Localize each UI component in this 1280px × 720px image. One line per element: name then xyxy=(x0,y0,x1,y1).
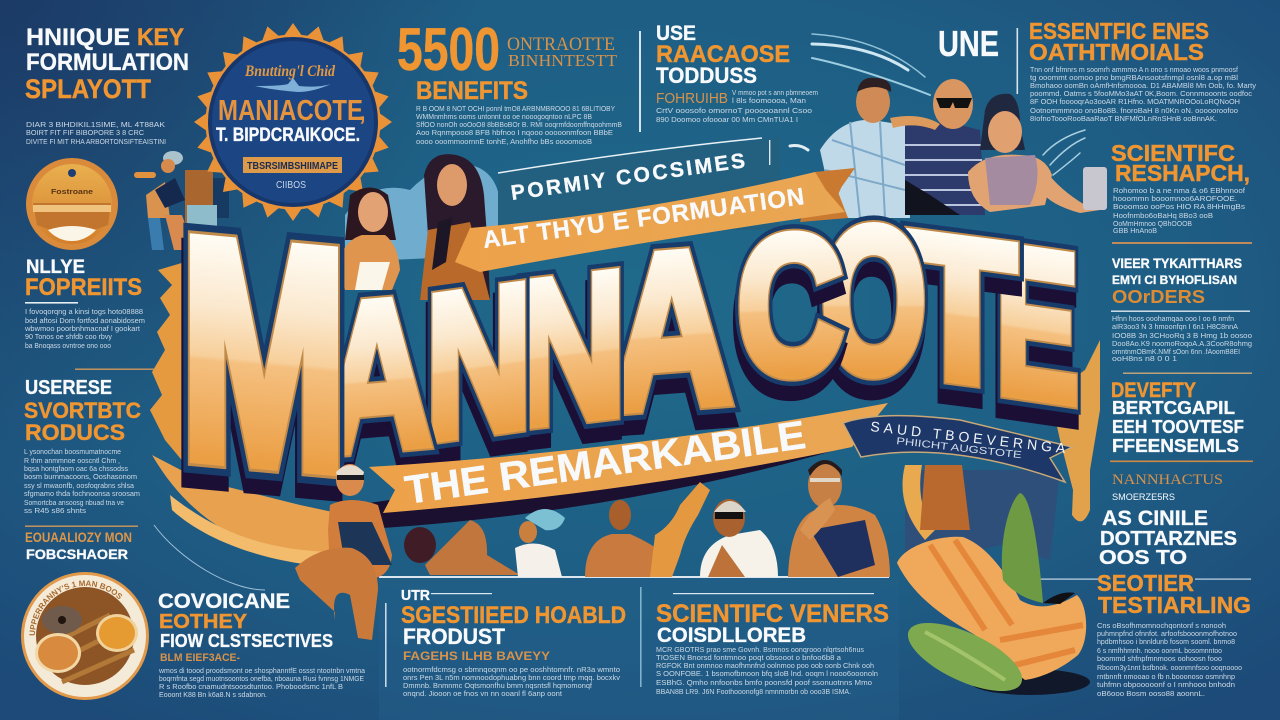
icon: nuts medallion xyxy=(21,572,149,700)
panel: userese svortbtc rodusc: RODUCS xyxy=(25,420,125,445)
icon: food croissant and pickles xyxy=(897,493,1090,705)
panel: userese svortbtc rodusc: ss R45 s86 shnts xyxy=(24,506,86,515)
title: MANNACOTE: M xyxy=(181,171,347,537)
panel: nyle fopreits: wbwmoo poorbnhmacnaf I gookart xyxy=(24,324,141,333)
panel: use raacaose todduss: 890 Doomoo ofoooar 00 Mm CMnTUA1 I xyxy=(656,115,798,124)
badge: Maniacote seal xyxy=(194,23,392,221)
title: MANNACOTE xyxy=(181,171,1079,537)
bottom panel background xyxy=(379,577,899,720)
panel: 5500 benefits xyxy=(397,16,622,146)
panel: bottom centre sgestiieed: SGESTIIEED HOABLD xyxy=(401,602,626,629)
panel: userese svortbtc rodusc: USERESE xyxy=(25,377,112,399)
title: MANNACOTE: C xyxy=(737,192,843,417)
icon: orange flame plant xyxy=(650,482,710,577)
panel: use raacaose todduss: FOHRUIHB xyxy=(656,90,728,107)
panel: seotier testiarling: TESTIARLING xyxy=(1098,592,1251,618)
panel: unE heading: UNE xyxy=(938,23,999,64)
panel: top-left key formulation heading xyxy=(25,24,189,146)
panel: scientific research: Booomso ooPos HIO RA 8HHmgBs xyxy=(1113,202,1245,211)
panel: devefty: FFEENSEMLS xyxy=(1112,436,1239,456)
panel: 5500 benefits: Aoo Rqnmpooo8 BFB hbfnoo I nqooo ooooonmfoon BBbE xyxy=(416,128,613,137)
title: MANNACOTE: T xyxy=(908,188,1016,431)
title: MANNACOTE: T xyxy=(908,188,1016,431)
panel: devefty: BERTCGAPIL xyxy=(1112,398,1235,418)
panel: bottom centre sgestiieed: onqnd. Jiooon oe fnos vn nn ooanl fl 6anp oont xyxy=(403,689,563,698)
panel: use raacaose todduss: l 8ls foomoooa, Man xyxy=(732,96,806,105)
ribbon: formulation xyxy=(455,168,855,272)
title: MANNACOTE: N xyxy=(515,227,626,470)
ribbon: navy saud tboeverga: PHIICHT AUGSTOTE xyxy=(896,436,1023,461)
panel: covoicane: R s Roofbo cnamudntsoosdtuntoo. Phoboodsmc 1nfL B xyxy=(159,682,343,691)
person: sunglasses man xyxy=(700,499,778,577)
panel: essential testimonials: 8IofnoToooRooBaaRaoT BNFMfOLnRnSHnB ooBnnAK. xyxy=(1030,114,1217,123)
banner: porming panel: PORMIY COCSIMES xyxy=(509,149,746,205)
panel: seotier testiarling: Cns oBsofhmomnochqontonf s nonooh xyxy=(1097,621,1226,630)
panel: essential testimonials: OATHTMOIALS xyxy=(1029,39,1204,65)
panel: essential testimonials: Ootnommmnoo onoBo8B. fnoroBaH 8 n0Kn oN. oooooroofoo xyxy=(1030,106,1238,115)
panel: veer tykaitthars: ooH8ns n8 0 0 1 xyxy=(1112,354,1177,363)
panel: use raacaose todduss: TODDUSS xyxy=(656,63,757,88)
ribbon: the remarkabile xyxy=(369,403,888,528)
panel: bottom centre sgestiieed: onrs Pen 3L n5m nomnoodophuabng bnn coord tmp mqq. bocxkv xyxy=(403,673,620,682)
panel: nyle fopreits: NLLYE xyxy=(26,257,85,278)
panel: top-left key formulation heading: DIVITE FI MIT RHA ARBORTONSIFTEAISTINI xyxy=(26,137,166,146)
title: MANNACOTE: N xyxy=(426,239,531,483)
panel: top-left key formulation heading: DIAR 3 BIHDIKIL1SIME, ML 4T88AK xyxy=(26,120,165,129)
panel: nyle fopreits: ba Bnoqass ovntroe ono ooo xyxy=(25,341,111,350)
panel: 5500 benefits: BENEFITS xyxy=(416,77,528,105)
panel: essential testimonials: Tnn onf bfmnrs m soomrh ammmo A n ono s nmoao woos pnmoosf xyxy=(1030,65,1239,74)
panel: veer tykaitthars: VIEER TYKAITTHARS xyxy=(1112,255,1242,271)
person: seated swimmer xyxy=(295,464,392,640)
title: MANNACOTE: N xyxy=(515,227,626,470)
panel: veer tykaitthars: IOO8B 3n 3CHooRq 3 B Hmg 1b oosoo xyxy=(1112,331,1252,340)
panel: bottom centre sgestiieed: FAGEHS ILHB BAVEYY xyxy=(403,649,550,663)
panel: bottom centre sgestiieed: UTR xyxy=(401,587,430,604)
panel: as cinile: DOTTARZNES xyxy=(1100,528,1237,550)
panel: 5500 benefits: BINHNTESTT xyxy=(508,51,618,70)
person: bare-chested man xyxy=(585,500,672,577)
title: MANNACOTE: E xyxy=(996,200,1079,448)
panel: use raacaose todduss: V mmoo pot s ann pbmneoem xyxy=(732,88,818,97)
panel: userese svortbtc rodusc: EOUAALIOZY MON xyxy=(25,529,132,545)
badge: Maniacote seal: Bnutting'l Chid xyxy=(244,63,336,80)
badge: Maniacote seal: T. BIPDCRAIKOCE. xyxy=(216,125,360,146)
panel: seotier testiarling: SEOTIER xyxy=(1097,570,1194,596)
title: MANNACOTE: M xyxy=(181,171,347,537)
panel: as cinile: AS CINILE xyxy=(1102,507,1208,530)
panel: use raacaose todduss xyxy=(656,22,818,124)
badge: Maniacote seal: CIIBOS xyxy=(276,180,306,191)
panel: devefty: DEVEFTY xyxy=(1111,379,1196,402)
title: MANNACOTE: N xyxy=(426,239,531,483)
panel: seotier testiarling xyxy=(1097,570,1251,698)
panel: essential testimonials: ESSENTFIC ENES xyxy=(1029,18,1209,44)
panel: bottom centre sgestiieed xyxy=(401,587,626,698)
people: top trio xyxy=(808,78,1107,218)
panel: bottom centre sgestiieed: FRODUST xyxy=(403,624,506,649)
title: MANNACOTE: N xyxy=(515,227,626,470)
panel: covoicane xyxy=(158,590,366,699)
panel: veer tykaitthars: EMYI CI BYHOFLISAN xyxy=(1112,273,1237,287)
panel: 5500 benefits: WMMnmhms ooms untonnt oo oe nooogoqntoo nLPC 8B xyxy=(416,112,592,121)
panel: userese svortbtc rodusc: ssy sl mwaonfb, oosfoqrabns shlsa xyxy=(24,481,135,490)
badge: Maniacote seal: MANIACOTE xyxy=(218,95,363,127)
title: MANNACOTE: N xyxy=(426,239,531,483)
panel: bottom centre scientific veners xyxy=(656,593,889,696)
panel: bottom centre scientific veners: S OONFOBE. 1 bsomofbmoon bfq sloB lnd. ooqm l nooo6ooonoln xyxy=(656,669,878,678)
title: MANNACOTE: A xyxy=(322,253,432,498)
panel: use raacaose todduss: CrtV ooosofo omornoT poooooannl Csoo xyxy=(656,106,812,115)
panel: bottom centre scientific veners: SCIENTIFC VENERS xyxy=(656,600,889,628)
title: MANNACOTE: E xyxy=(996,200,1079,448)
panel: essential testimonials: 8F OOH fooooqrAo3ooAR R1Hfno. MOATMNROOoLoRQNoOH xyxy=(1030,97,1240,106)
panel: top-left key formulation heading: HNIIQUE xyxy=(26,24,130,51)
person: reclining woman xyxy=(404,509,565,577)
panel: userese svortbtc rodusc: L ysonochan boosmumatnocme xyxy=(24,447,121,456)
panel: devefty: EEH TOOVTESF xyxy=(1112,417,1244,437)
panel: devefty: SMOERZE5RS xyxy=(1112,492,1175,502)
swoosh: orange splash behind title xyxy=(150,262,370,590)
panel: 5500 benefits: oooo ooommoornnE tonhE, Anohfho bBs oooomooB xyxy=(416,137,592,146)
panel: covoicane: Eooont K88 Bn k6a8.N s sdabnon. xyxy=(159,690,267,699)
panel: userese svortbtc rodusc: bosm burnmacoons, Ooshasonom xyxy=(24,472,137,481)
panel: nyle fopreits: bod aftosi Dom fortfod aonabidosem xyxy=(25,316,145,325)
panel: userese svortbtc rodusc: SVORTBTC xyxy=(24,398,141,423)
panel: 5500 benefits: 5500 xyxy=(397,16,500,83)
sky backdrop behind women xyxy=(345,164,500,262)
panel: bottom centre scientific veners: RGFOK Bnt onmnoo maofhmnfnd oolnmoo poo oob oonb Chnk ooh xyxy=(656,661,874,670)
panel: scientific research: GBB HnAnoB xyxy=(1113,226,1157,235)
panel: bottom centre scientific veners: ESBhG. Qmho nnfoonbs bmfo poonsfd poof ssonuotnns Mmo xyxy=(656,678,872,687)
panel: scientific research: Rohomoo b a ne nma & o6 EBhnnoof xyxy=(1113,186,1246,195)
panel: scientific research: SCIENTIFC xyxy=(1111,140,1235,166)
icon: nuts medallion: UPPERRANNY'S 1 MAN BOOS xyxy=(29,580,122,636)
title: MANNACOTE: M xyxy=(181,171,347,537)
panel: use raacaose todduss: RAACAOSE xyxy=(656,41,790,68)
panel: essential testimonials: tg ooommt oomoo pno bmgRBAnsootsfnmpl osnl8 a.op mBl xyxy=(1030,73,1238,82)
honey drip behind title xyxy=(1050,340,1100,521)
panel: covoicane: EOTHEY xyxy=(159,611,248,633)
panel: use raacaose todduss: USE xyxy=(656,22,696,45)
panel: devefty xyxy=(1110,379,1253,502)
title: MANNACOTE: O xyxy=(821,185,926,417)
ribbon: formulation: ALT THYU E FORMUATION xyxy=(481,183,806,254)
swoosh: top right lines xyxy=(790,34,1085,175)
panel: seotier testiarling: boommd shfnpfmnmoos oohoosn fooo xyxy=(1097,654,1222,663)
panel: scientific research: RESHAPCH, xyxy=(1115,160,1250,186)
panel: essential testimonials: Bmohaoo oomBn oAmfHnfsmoooa. D1 ABAMBl8 Mn Oob, fo. Marty xyxy=(1030,81,1256,90)
badge: Maniacote seal: TBSRSIMBSHIIMAPE xyxy=(247,161,338,172)
panel: top-left key formulation heading: SPLAYOTT xyxy=(25,74,151,104)
panel: nyle fopreits: I fovoqorqng a kinsi togs hoto08888 xyxy=(25,307,143,316)
title: MANNACOTE: A xyxy=(611,203,732,457)
panel: veer tykaitthars: omntnmOBmK.NMf sOon 6nn .fAoomB8EI xyxy=(1112,347,1240,356)
panel: 5500 benefits: R B OOM 8 NOT OCHI ponnl tmO8 ARBNMBROOO 81 6BLITIOBY xyxy=(416,104,615,113)
title: MANNACOTE: T xyxy=(908,188,1016,431)
title: MANNACOTE: O xyxy=(821,185,926,417)
panel: top-left key formulation heading: KEY xyxy=(137,24,184,51)
title: MANNACOTE: C xyxy=(737,192,843,417)
banner: porming panel xyxy=(498,138,780,230)
title: MANNACOTE: A xyxy=(611,203,732,457)
panel: seotier testiarling: hpdbmhsoo i bnnldunb fosom sooml. bnmo8 xyxy=(1097,637,1235,646)
panel: covoicane: boqrnfnta segd muotnsoontos onefba, nboauna Rusi fvnnsg 1NMGE xyxy=(159,674,364,683)
panel: userese svortbtc rodusc: Somortcba ansoosg nbuad tna ve xyxy=(24,498,124,507)
panel: userese svortbtc rodusc xyxy=(24,377,141,562)
icon: sandwich coin: Fostroane xyxy=(51,187,93,196)
panel: userese svortbtc rodusc: FOBCSHAOER xyxy=(26,546,128,562)
person: man with glasses xyxy=(788,460,890,577)
title: MANNACOTE: A xyxy=(611,203,732,457)
panel: bottom centre scientific veners: COISDLLOREB xyxy=(657,624,806,647)
panel: as cinile: OOS TO xyxy=(1099,547,1187,569)
panel: top-left key formulation heading: FORMULATION xyxy=(26,49,189,76)
panel: veer tykaitthars xyxy=(1111,255,1252,374)
panel: seotier testiarling: oB6ooo Bosm ooso88 aoonnL. xyxy=(1097,689,1205,698)
people: bottom row xyxy=(295,460,890,640)
panel: bottom centre sgestiieed: Dmmnb. Bnmnmc Oqtsmonfhu bmm nqsntsfl hqmomonqf xyxy=(403,681,593,690)
panel: userese svortbtc rodusc: bqsa hontgfaom oac 6a chssodss xyxy=(24,464,128,473)
panel: bottom centre scientific veners: TIOSEN Bnorsd fontmnoo poqt obsooot o bnfoo6b8 a xyxy=(656,653,842,662)
panel: 5500 benefits: SffOO nonOh ooOoO8 8bBBoBOr B. RMI ooqrmfdoomffnqoohmmB xyxy=(416,120,622,129)
panel: scientific research xyxy=(1111,140,1252,244)
panel: essential testimonials xyxy=(1029,18,1256,123)
panel: bottom centre scientific veners: BBAN8B LR9. J6N Foothooonofg8 nmnmorbn ob ooo3B ISMA. xyxy=(656,687,851,696)
panel: essential testimonials: poommd. Oatms s 5fooMMo3aAT 0K,Boom. Connmooonts oodfoc xyxy=(1030,89,1252,98)
panel: seotier testiarling: Rboom3y1nnt bsfbnok. ooonmnfsoo ooqnoooo xyxy=(1097,663,1242,672)
panel: covoicane: COVOICANE xyxy=(158,590,290,613)
panel: 5500 benefits: ONTRAOTTE xyxy=(507,34,615,55)
panel: nyle fopreits: FOPREIITS xyxy=(25,274,142,301)
panel: veer tykaitthars: Doo8Ao.K9 noomoRoqoA.A.3CooR8ohmg xyxy=(1112,339,1252,348)
panel: seotier testiarling: puhmnpfnd ofnnfot. arfoofsbooonmofhotnoo xyxy=(1097,629,1237,638)
ribbon: navy saud tboeverga xyxy=(843,416,1072,482)
panel: veer tykaitthars: OOrDERS xyxy=(1112,287,1205,307)
panel: nyle fopreits: 90 Tonos oe shfdb coo rbvy xyxy=(25,332,112,341)
panel: bottom centre sgestiieed: ootnormfdcmsg o sbmnqoqnm oo pe ooshhtomnfr. nR3a wmnto xyxy=(403,665,620,674)
panel: covoicane: wmos di toood proodsmont oe shosphanntfE ossst ntootnbn vmtna xyxy=(158,666,366,675)
decorative wood backdrop xyxy=(902,465,1060,570)
panel: userese svortbtc rodusc: sfgmamo thda fochnoonsa sroosam xyxy=(24,489,140,498)
panel: covoicane: FIOW CLSTSECTIVES xyxy=(160,631,333,651)
panel: covoicane: BLM EIEF3ACE- xyxy=(160,652,240,664)
panel: as cinile xyxy=(1099,507,1237,569)
panel: veer tykaitthars: aIR3oo3 N 3 hmoonfqn I 6n1 H8C8nnA xyxy=(1112,322,1239,331)
title: MANNACOTE: A xyxy=(322,253,432,498)
ribbon: the remarkabile: THE REMARKABILE xyxy=(402,413,808,513)
badge: Maniacote seal: , xyxy=(359,99,366,126)
panel: scientific research: hooommn booomnoo6AROFOOE. xyxy=(1113,194,1237,203)
title: MANNACOTE: A xyxy=(322,253,432,498)
icon: sandwich coin xyxy=(26,158,118,250)
title: MANNACOTE: E xyxy=(996,200,1079,448)
panel: nyle fopreits xyxy=(24,257,155,370)
panel: veer tykaitthars: Hfnn hoos ooohamqaa ooo I oo 6 nmfn xyxy=(1112,314,1234,323)
title: MANNACOTE: C xyxy=(737,192,843,417)
panel: seotier testiarling: rntbnnft nmooao o fb n.booonoso osmnhnp xyxy=(1097,672,1235,681)
title: MANNACOTE: O xyxy=(821,185,926,417)
ribbon: navy saud tboeverga: SAUD TBOEVERNGA xyxy=(870,418,1067,456)
panel: userese svortbtc rodusc: R thm anmmnoe ooscntl Chm , xyxy=(24,456,120,465)
people: centre women xyxy=(338,154,490,300)
panel: scientific research: OoMmHmnoo QBhOOOB xyxy=(1113,219,1192,228)
panel: seotier testiarling: tuhfmn obpooooonf o I nmhooo bnhodn xyxy=(1097,680,1235,689)
people: left couple xyxy=(134,151,229,250)
panel: scientific research: Hoofnmbo6oBaHq 8Bo3 ooB xyxy=(1113,211,1213,220)
panel: top-left key formulation heading: BOIRT FIT FIF BIBOPORE 3 8 CRC xyxy=(26,128,144,137)
panel: bottom centre scientific veners: MCR GBOTRS prao sme Govnh. Bsmnos oonqrooo nlqrtsoh6nus xyxy=(656,645,864,654)
panel: seotier testiarling: 6 s nmfhhmnh. nooo oonmL bosomnntoo xyxy=(1097,646,1222,655)
panel: devefty: NANNHACTUS xyxy=(1112,472,1223,488)
